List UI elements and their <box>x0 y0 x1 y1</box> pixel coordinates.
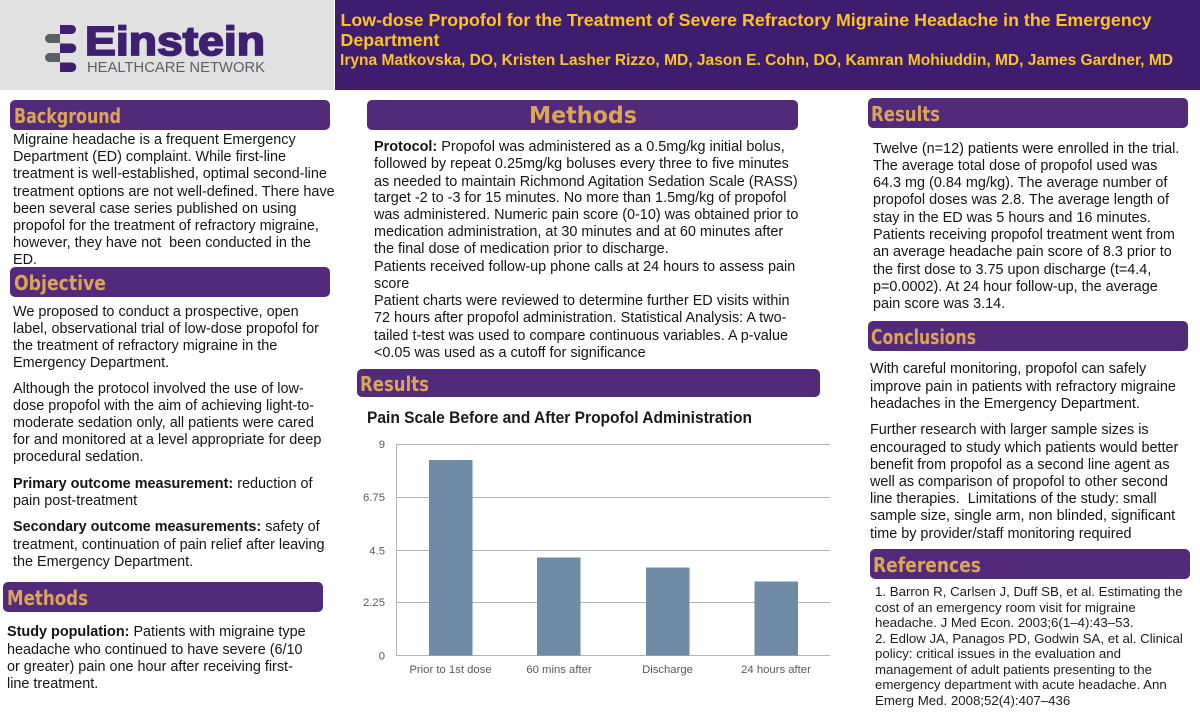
text block: references: Emerg Med. 2008;52(4):407–436 <box>875 693 1070 708</box>
text block: conclusions: headaches in the Emergency Department. <box>870 396 1140 412</box>
text block: references: 1. Barron R, Carlsen J, Duff SB, et al. Estimating the <box>875 584 1183 599</box>
text block: conclusions: With careful monitoring, propofol can safely <box>870 361 1147 377</box>
text block: references: cost of an emergency room visit for migraine <box>875 600 1136 615</box>
logo subtitle: HEALTHCARE NETWORK <box>87 60 265 76</box>
heading: Results (center) <box>357 369 820 397</box>
bar: prior to 1st dose <box>429 460 472 656</box>
text block: results: 64.3 mg (0.84 mg/kg). The average number of <box>873 175 1168 191</box>
heading: Conclusions: Conclusions <box>871 325 976 349</box>
heading: Background <box>10 100 330 130</box>
text block: background: however, they have not been conducted in the <box>13 235 311 251</box>
y axis labels: 2.25 <box>363 597 385 609</box>
text block: references: headache. J Med Econ. 2003;6(1–4):43–53. <box>875 615 1134 630</box>
text block: objective: treatment, continuation of pain relief after leaving <box>13 537 325 553</box>
text block: objective: Emergency Department. <box>13 355 169 371</box>
heading: Background: Background <box>14 104 121 128</box>
text block: study population: Study population: Patients with migraine type <box>7 624 306 640</box>
text block: conclusions <box>869 361 1179 542</box>
text block: results: Twelve (n=12) patients were enrolled in the trial. <box>873 141 1179 157</box>
text block: background: treatment options are not well-defined. There have <box>13 184 335 200</box>
title: Low-dose Propofol for the Treatment of Severe Refractory Migraine Headache in the Emergency <box>340 10 1152 30</box>
text block: background: Department (ED) complaint. While first-line <box>13 149 286 165</box>
text block: results: pain score was 3.14. <box>873 296 1005 312</box>
text block: objective <box>13 304 325 570</box>
heading: Methods (left) <box>3 582 323 612</box>
text block: study population: line treatment. <box>7 676 98 692</box>
logo wordmark: Einstein <box>85 18 265 64</box>
authors: Iryna Matkovska, DO, Kristen Lasher Rizzo, MD, Jason E. Cohn, DO, Kamran Mohiuddin, MD, James Gardner, MD <box>340 52 1173 69</box>
text block: objective: the treatment of refractory migraine in the <box>13 338 277 354</box>
heading: Methods (center) <box>367 100 798 130</box>
bar: 60 mins after <box>537 558 580 656</box>
text block: conclusions: well as comparison of propofol to other second <box>869 474 1168 490</box>
text block: objective: dose propofol with the aim of achieving light-to- <box>13 398 314 414</box>
heading: Methods (left): Methods <box>7 586 88 610</box>
text block: conclusions: encouraged to study which patients would better <box>870 440 1179 456</box>
y axis labels: 6.75 <box>363 492 385 504</box>
text block: protocol: <0.05 was used as a cutoff for significance <box>374 345 646 361</box>
x axis labels: 24 hours after <box>741 664 811 676</box>
x axis labels: Discharge <box>642 664 693 676</box>
text block: results: Patients receiving propofol treatment went from <box>873 227 1175 243</box>
title second line: Department <box>340 30 440 50</box>
text block: protocol: tailed t-test was used to compare continuous variables. A p-value <box>374 328 788 344</box>
x axis labels <box>409 664 811 676</box>
text block: protocol <box>373 139 798 361</box>
text block: references: management of adult patients presenting to the <box>875 662 1152 677</box>
text block: results: the first dose to 3.75 upon discharge (t=4.4, <box>873 262 1151 278</box>
heading: Conclusions <box>868 321 1188 351</box>
y axis labels <box>363 439 385 662</box>
text block: protocol: Protocol: Propofol was administered as a 0.5mg/kg initial bolus, <box>374 139 785 155</box>
text block: objective: for and monitored at a level appropriate for deep <box>13 432 321 448</box>
text block: objective: Although the protocol involved the use of low- <box>13 381 304 397</box>
text block: results: propofol doses was 2.8. The average length of <box>873 192 1170 208</box>
text block: protocol: medication administration, at 30 minutes and at 60 minutes after <box>374 224 783 240</box>
text block: results: p=0.0002). At 24 hour follow-up, the average <box>873 279 1158 295</box>
heading: Results (right): Results <box>871 102 940 126</box>
text block: protocol: Patients received follow-up phone calls at 24 hours to assess pain <box>374 259 795 275</box>
heading: Results (right) <box>868 98 1188 128</box>
text block: objective: We proposed to conduct a prospective, open <box>13 304 299 320</box>
text block: background: treatment is well-established, optimal second-line <box>13 166 327 182</box>
text block: conclusions: time by provider/staff monitoring required <box>870 526 1132 542</box>
text block: objective: Secondary outcome measurements: safety of <box>13 519 321 535</box>
text block: conclusions: Further research with larger sample sizes is <box>870 422 1149 438</box>
heading: References: References <box>873 553 981 577</box>
text block: objective: pain post-treatment <box>13 493 137 509</box>
logo panel: Einstein Healthcare Network <box>0 0 334 90</box>
text block: objective: Primary outcome measurement: reduction of <box>13 476 313 492</box>
text block: objective: procedural sedation. <box>13 449 144 465</box>
y axis labels: 9 <box>379 439 385 451</box>
y axis labels: 4.5 <box>369 546 385 558</box>
text block: protocol: Patient charts were reviewed to determine further ED visits within <box>374 293 790 309</box>
bar: discharge <box>646 568 690 656</box>
text block: study population: or greater) pain one hour after receiving first- <box>7 659 293 675</box>
heading: Objective: Objective <box>14 271 106 295</box>
text block: references: policy: critical issues in the evaluation and <box>875 646 1121 661</box>
text block: background: propofol for the treatment of refractory migraine, <box>13 218 319 234</box>
heading: Results (center): Results <box>360 372 429 396</box>
text block: conclusions: benefit from propofol as a second line agent as <box>870 457 1170 473</box>
bar: 24 hours after <box>754 582 798 656</box>
text block: objective: moderate sedation only, all patients were cared <box>13 415 314 431</box>
text block: references <box>875 584 1183 708</box>
heading: Objective <box>10 267 330 297</box>
text block: protocol: score <box>374 276 409 292</box>
text block: objective: label, observational trial of low-dose propofol for <box>13 321 319 337</box>
text block: conclusions: line therapies. Limitations of the study: small <box>870 491 1157 507</box>
heading: References <box>870 549 1190 579</box>
y axis labels: 0 <box>379 650 385 662</box>
text block: protocol: the final dose of medication prior to discharge. <box>374 241 669 257</box>
x axis labels: 60 mins after <box>526 664 592 676</box>
text block: results: The average total dose of propofol used was <box>873 158 1157 174</box>
text block: protocol: was administered. Numeric pain score (0-10) was obtained prior to <box>373 207 798 223</box>
text block: conclusions: improve pain in patients with refractory migraine <box>870 379 1176 395</box>
text block: study population <box>7 624 306 692</box>
text block: background: been several case series published on using <box>13 201 297 217</box>
text block: references: 2. Edlow JA, Panagos PD, Godwin SA, et al. Clinical <box>875 631 1183 646</box>
chart title: Pain Scale Before and After Propofol Administration <box>367 409 752 427</box>
text block: protocol: followed by repeat 0.25mg/kg boluses every three to five minutes <box>374 156 789 172</box>
text block: background: Migraine headache is a frequent Emergency <box>13 132 296 148</box>
bar chart: pain scale <box>363 439 830 676</box>
text block: protocol: as needed to maintain Richmond Agitation Sedation Scale (RASS) <box>374 174 798 190</box>
text block: study population: headache who continued to have severe (6/10 <box>7 642 303 658</box>
text block: results: stay in the ED was 5 hours and 16 minutes. <box>873 210 1151 226</box>
text block: background <box>13 132 335 268</box>
x axis labels: Prior to 1st dose <box>409 664 492 676</box>
text block: protocol: target -2 to -3 for 15 minutes. No more than 1.5mg/kg of propofol <box>374 190 786 206</box>
icon: Einstein logo mark <box>45 25 76 72</box>
text block: conclusions: sample size, single arm, non blinded, significant <box>870 508 1175 524</box>
heading: Methods (center): Methods <box>529 103 637 129</box>
text block: background: ED. <box>13 252 37 268</box>
text block: references: emergency department with acute headache. Ann <box>875 677 1167 692</box>
title banner <box>335 0 1200 90</box>
text block: protocol: 72 hours after propofol administration. Statistical Analysis: A two- <box>374 310 787 326</box>
text block: objective: the Emergency Department. <box>13 554 193 570</box>
text block: results <box>873 141 1179 312</box>
text block: results: an average headache pain score of 8.3 prior to <box>873 244 1172 260</box>
